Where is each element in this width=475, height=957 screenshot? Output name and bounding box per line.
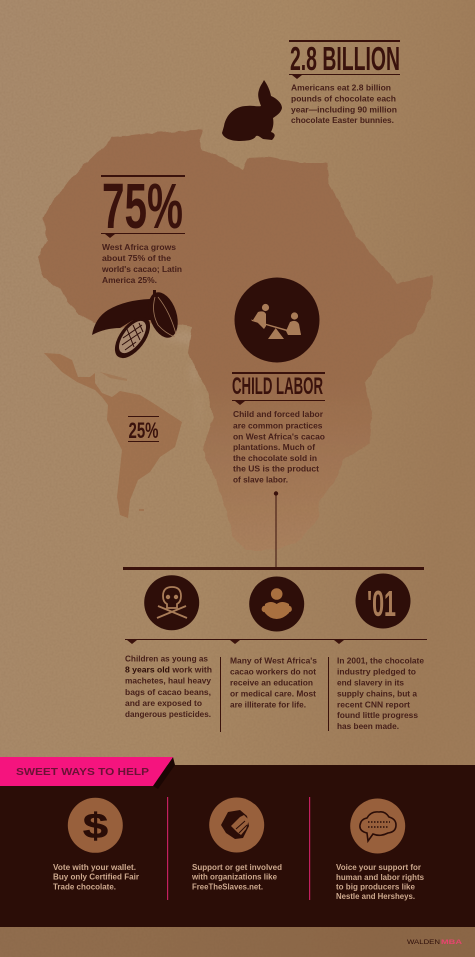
text: vote with your wallet: Trade chocolate. [53, 882, 116, 892]
panel: sweet ways to help [0, 765, 475, 927]
text: support organizations: Support or get involved [192, 862, 282, 872]
text: children 8 years old [125, 654, 212, 719]
text: support organizations [191, 862, 282, 892]
text: child labor description [233, 409, 325, 484]
stat: 2.8 billion: chocolate Easter bunnies. [291, 115, 394, 125]
text: 2001 pledge: found little progress [337, 710, 418, 720]
stat: 2.8 billion: 2.8 BILLION [290, 41, 400, 78]
text: child labor description: the chocolate sold in [233, 453, 317, 463]
footer strip [0, 927, 475, 957]
icon: dollar [68, 798, 123, 853]
text: voice your support: to big producers like [336, 882, 415, 892]
text: voice your support: human and labor rights [336, 872, 424, 882]
stat: 75 percent: America 25%. [102, 275, 157, 285]
footer logo: WALDEN [407, 939, 440, 946]
icon: seesaw circle [234, 278, 320, 362]
text: 2001 pledge: recent CNN report [337, 700, 410, 710]
icon: year 2001: '01 [367, 583, 396, 624]
text: support organizations: with organizations like [191, 872, 277, 882]
icon: year 2001 [356, 574, 410, 628]
icon: speech cloud [350, 798, 405, 854]
stat: 2.8 billion: Americans eat 2.8 billion [291, 82, 391, 92]
icon: reader [249, 576, 304, 632]
stat: 75 percent: West Africa grows [102, 242, 176, 252]
stat: 25 percent [128, 416, 159, 443]
icon: rabbit [222, 80, 282, 141]
icon: skull and crossbones [144, 575, 199, 630]
text: children 8 years old: 8 years old work with [125, 664, 212, 674]
text: vote with your wallet: Buy only Certified Fair [53, 872, 140, 882]
stat: 75 percent [101, 170, 185, 285]
text: child labor description: are common practices [233, 420, 323, 430]
text: no education: or medical care. Most [230, 688, 316, 698]
stat: 25 percent: 25% [128, 418, 158, 443]
text: voice your support: Nestle and Hersheys. [336, 891, 415, 901]
text: 2001 pledge: supply chains, but a [337, 688, 417, 698]
text: child labor description: Child and forced labor [233, 409, 324, 419]
text: 2001 pledge: In 2001, the chocolate [337, 656, 424, 666]
text: no education [230, 656, 317, 710]
text: vote with your wallet [53, 862, 140, 892]
text: children 8 years old: bags of cacao beans, [125, 687, 211, 697]
heading: child labor: CHILD LABOR [232, 373, 323, 400]
banner shadow [153, 757, 175, 789]
text: child labor description: plantations. Much of [233, 442, 315, 452]
text: 2001 pledge: industry pledged to [337, 666, 416, 676]
banner: sweet ways to help [0, 757, 173, 786]
footer logo: MBA [441, 939, 462, 946]
text: no education: are illiterate for life. [230, 700, 306, 710]
text: voice your support: Voice your support for [336, 862, 422, 872]
text: children 8 years old: Children as young as [125, 654, 208, 664]
footer logo [407, 939, 462, 946]
text: support organizations: FreeTheSlaves.net. [192, 882, 263, 892]
text: 2001 pledge: has been made. [337, 721, 399, 731]
stat: 2.8 billion: pounds of chocolate each [291, 94, 396, 104]
text: children 8 years old: dangerous pesticides. [125, 709, 211, 719]
text: child labor description: of slave labor. [233, 474, 288, 484]
text: children 8 years old: and are exposed to [125, 698, 202, 708]
text: 2001 pledge: end slavery in its [337, 678, 404, 688]
heading: child labor [232, 372, 325, 405]
map: Central and South America [44, 353, 182, 518]
text: no education: Many of West Africa's [230, 656, 317, 666]
text: no education: receive an education [230, 678, 313, 688]
text: vote with your wallet: Vote with your wallet. [53, 862, 136, 872]
map: pale paper halo around Africa [150, 332, 200, 440]
map: Africa [38, 130, 433, 550]
text: child labor description: on West Africa's cacao [233, 432, 325, 442]
icon: dollar: $ [83, 807, 108, 846]
divider rule with pointers [125, 639, 427, 644]
stat: 2.8 billion [289, 40, 400, 125]
stat: 75 percent: 75% [102, 170, 183, 242]
text: voice your support [336, 862, 424, 901]
stat: 75 percent: about 75% of the [102, 253, 171, 263]
connector line [123, 491, 424, 570]
stat: 2.8 billion: year—including 90 million [291, 104, 397, 114]
text: child labor description: the US is the product [233, 464, 319, 474]
banner: sweet ways to help: SWEET WAYS TO HELP [16, 766, 149, 778]
text: children 8 years old: machetes, haul heavy [125, 676, 211, 686]
stat: 75 percent: world's cacao; Latin [101, 264, 182, 274]
text: no education: cacao workers do not [230, 666, 316, 676]
icon: handshake [209, 798, 264, 852]
text: 2001 pledge [337, 656, 424, 731]
icon: cacao pod and leaf [92, 288, 183, 364]
